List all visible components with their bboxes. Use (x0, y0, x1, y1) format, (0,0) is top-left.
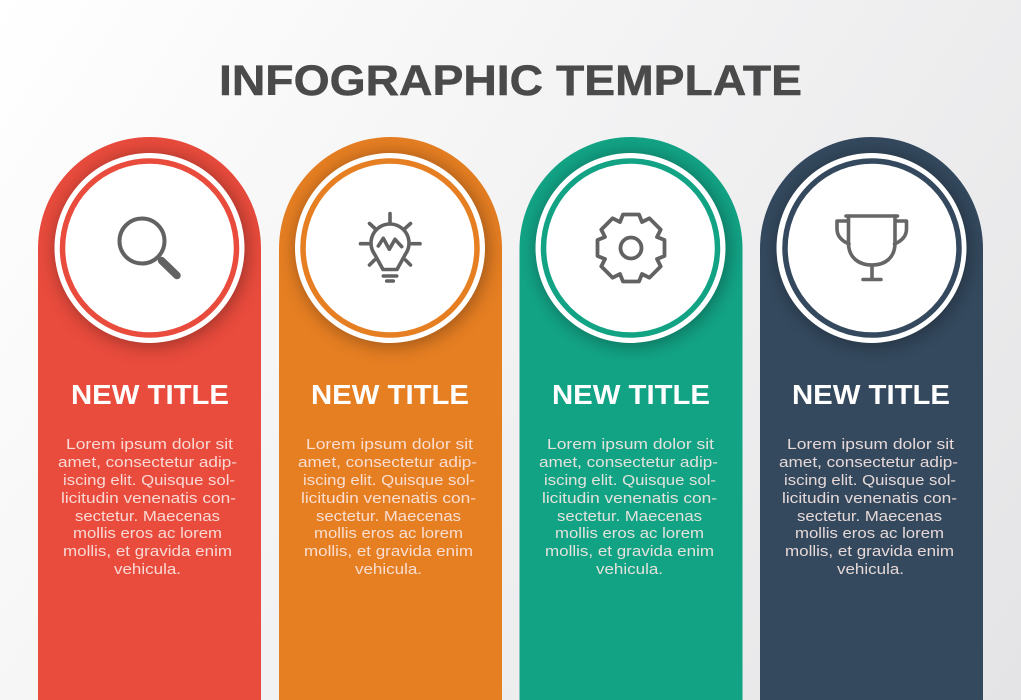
text block: orange column: vehicula. (355, 561, 422, 578)
text block: red column: amet, consectetur adip- (58, 454, 237, 471)
text block: green column: vehicula. (596, 561, 663, 578)
panel: orange column (279, 137, 502, 700)
text block: navy column: Lorem ipsum dolor sit (787, 436, 955, 453)
text block: orange column: mollis, et gravida enim (304, 543, 473, 560)
text block: red column: sectetur. Maecenas (75, 508, 220, 525)
text block: navy column: amet, consectetur adip- (779, 454, 958, 471)
text block: red column: vehicula. (114, 561, 181, 578)
circle badge: red (54, 153, 244, 343)
circle badge: green (536, 153, 726, 343)
heading: orange column: NEW TITLE (311, 379, 469, 410)
text block: orange column: licitudin venenatis con- (301, 490, 476, 507)
text block: green column: licitudin venenatis con- (542, 490, 717, 507)
text block: green column: amet, consectetur adip- (539, 454, 718, 471)
text block: red column (58, 436, 237, 578)
text block: red column: iscing elit. Quisque sol- (63, 472, 235, 489)
text block: orange column: mollis eros ac lorem (314, 525, 463, 542)
icon: magnifying glass (120, 218, 177, 276)
text block: red column: mollis, et gravida enim (63, 543, 232, 560)
panel: green column (520, 137, 742, 700)
text block: navy column (779, 436, 958, 578)
text block: navy column: mollis eros ac lorem (795, 525, 944, 542)
text block: green column (539, 436, 718, 578)
text block: red column: licitudin venenatis con- (61, 490, 236, 507)
text block: green column: Lorem ipsum dolor sit (547, 436, 715, 453)
text block: red column: mollis eros ac lorem (73, 525, 222, 542)
title: INFOGRAPHIC TEMPLATE (219, 57, 802, 105)
icon: trophy (837, 216, 906, 280)
circle badge: navy (776, 153, 966, 343)
text block: navy column: sectetur. Maecenas (797, 508, 942, 525)
text block: green column: iscing elit. Quisque sol- (544, 472, 716, 489)
text block: navy column: vehicula. (837, 561, 904, 578)
icon: light bulb (360, 214, 420, 281)
circle badge: orange (295, 153, 485, 343)
text block: navy column: licitudin venenatis con- (782, 490, 957, 507)
text block: green column: mollis eros ac lorem (555, 525, 704, 542)
panel: red column (38, 137, 261, 700)
heading: red column: NEW TITLE (71, 379, 229, 410)
text block: green column: mollis, et gravida enim (545, 543, 714, 560)
text block: navy column: iscing elit. Quisque sol- (784, 472, 956, 489)
text block: orange column: amet, consectetur adip- (298, 454, 477, 471)
icon: gear (598, 214, 664, 282)
text block: navy column: mollis, et gravida enim (785, 543, 954, 560)
text block: orange column: Lorem ipsum dolor sit (306, 436, 474, 453)
text block: orange column (298, 436, 477, 578)
text block: orange column: iscing elit. Quisque sol- (303, 472, 475, 489)
text block: green column: sectetur. Maecenas (557, 508, 702, 525)
text block: orange column: sectetur. Maecenas (316, 508, 461, 525)
panel: navy column (760, 137, 983, 700)
text block: red column: Lorem ipsum dolor sit (66, 436, 234, 453)
heading: navy column: NEW TITLE (792, 379, 950, 410)
heading: green column: NEW TITLE (552, 379, 710, 410)
